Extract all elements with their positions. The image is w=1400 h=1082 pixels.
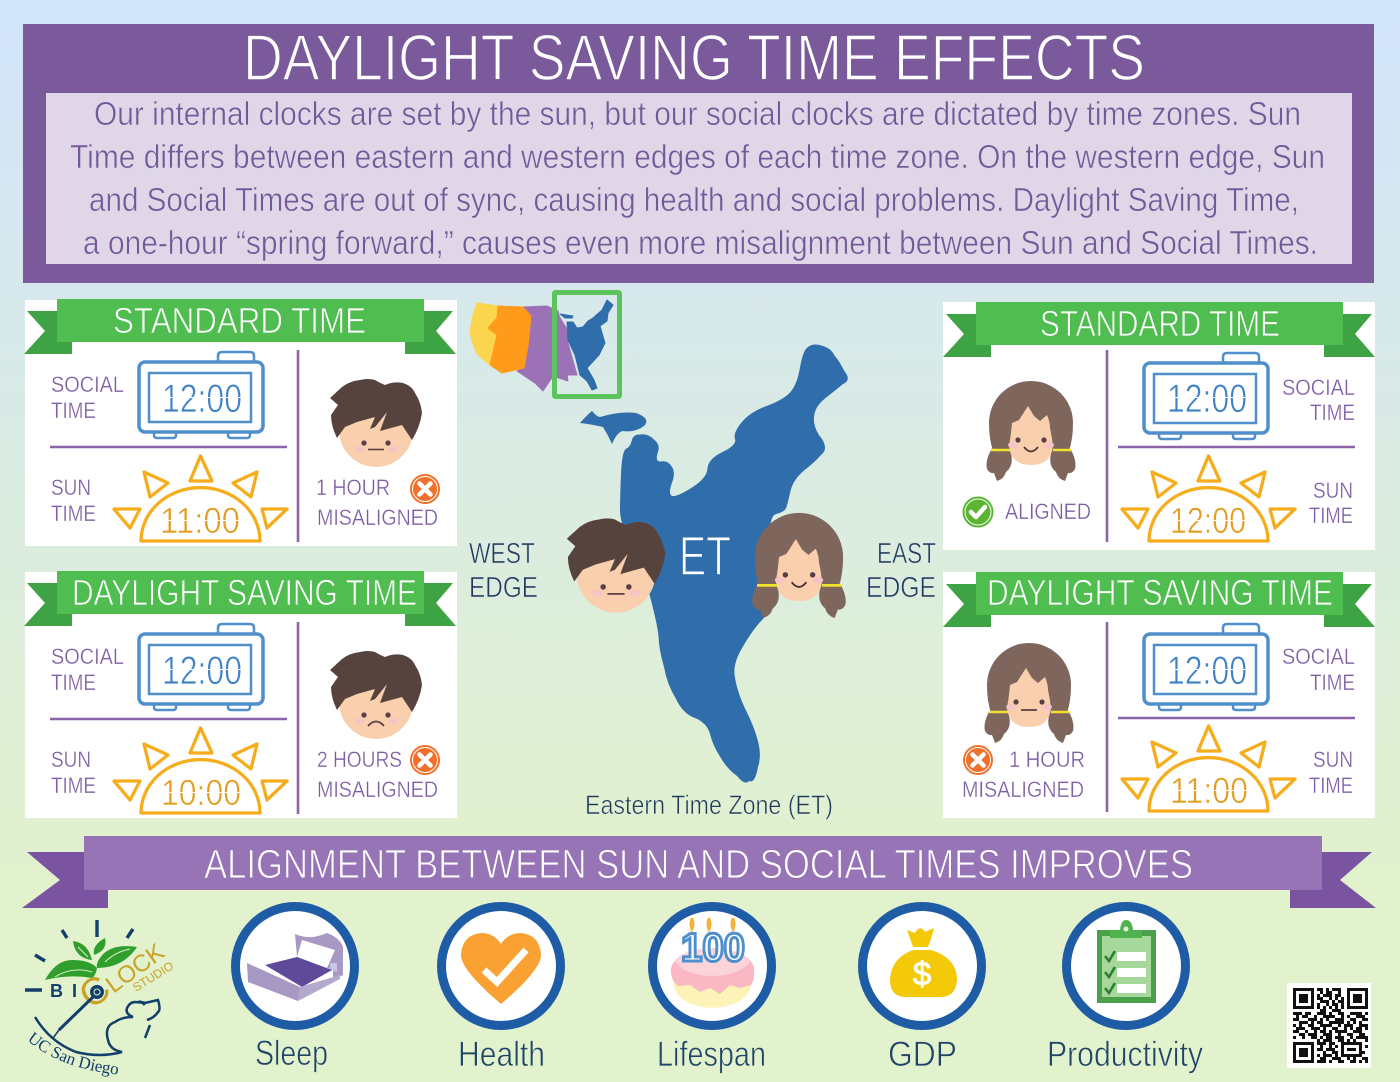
social time label: TIME <box>1310 670 1355 695</box>
icon: money bag <box>862 906 982 1026</box>
label: west edge <box>469 538 538 604</box>
icon: x mark <box>963 745 993 775</box>
label: lifespan: Lifespan <box>657 1035 766 1074</box>
misaligned label <box>962 747 1085 802</box>
intro text block: Our internal clocks are set by the sun, but our social clocks are dictated by time zones. Sun <box>94 95 1301 132</box>
icon: girl smiling <box>986 381 1076 481</box>
ribbon: standard time: STANDARD TIME <box>1040 303 1280 344</box>
header panel <box>23 21 1374 283</box>
icon: sun 11:00: 11:00 <box>1170 770 1248 811</box>
misaligned label <box>316 475 438 530</box>
icon: alarm clock 12:00 <box>1144 353 1268 439</box>
misaligned label: MISALIGNED <box>962 777 1084 802</box>
map: eastern time zone <box>580 345 848 783</box>
item: lifespan <box>652 906 772 1074</box>
icon: alarm clock 12:00: 12:00 <box>162 649 242 693</box>
ribbon: standard time <box>943 302 1375 357</box>
logo: biological clock studio: STUDIO <box>130 959 176 995</box>
label: sleep: Sleep <box>255 1034 328 1073</box>
label: west edge: WEST <box>469 538 535 570</box>
label: east edge <box>866 538 936 604</box>
misaligned label: 1 HOUR <box>316 475 390 500</box>
sun time label <box>1309 478 1353 528</box>
highlight frame <box>554 292 620 396</box>
icon: boy neutral <box>330 379 422 467</box>
item: productivity <box>1047 906 1203 1074</box>
social time label: SOCIAL <box>1282 644 1355 669</box>
sun time label: TIME <box>1309 503 1353 528</box>
ribbon: daylight saving time <box>24 571 456 626</box>
misaligned label: 2 HOURS <box>317 747 402 772</box>
panel: east edge daylight saving time <box>943 572 1375 818</box>
icon: alarm clock 12:00 <box>139 624 263 710</box>
icon: alarm clock 12:00 <box>1144 624 1268 710</box>
icon: sun 11:00 <box>1122 726 1295 811</box>
banner: alignment improves: ALIGNMENT BETWEEN SUN AND SOCIAL TIMES IMPROVES <box>204 841 1193 887</box>
map caption: Eastern Time Zone (ET) <box>585 790 833 820</box>
label: gdp: GDP <box>888 1035 957 1074</box>
label: east edge: EAST <box>877 538 936 570</box>
social time label: TIME <box>1310 400 1355 425</box>
logo: biological clock studio: CLOCK <box>72 929 171 1017</box>
sun time label: SUN <box>1313 478 1353 503</box>
social time label <box>1282 375 1355 425</box>
icon: sun 11:00 <box>114 456 287 541</box>
social time label: SOCIAL <box>1282 375 1355 400</box>
social time label: TIME <box>51 670 96 695</box>
icon: alarm clock 12:00: 12:00 <box>162 377 242 421</box>
logo: biological clock studio <box>25 920 176 1077</box>
item: gdp <box>862 906 982 1074</box>
social time label <box>1282 644 1355 695</box>
icon: check mark <box>962 496 994 528</box>
social time label <box>51 372 124 423</box>
misaligned label <box>317 747 438 802</box>
sun time label: TIME <box>51 501 96 526</box>
misaligned label: MISALIGNED <box>317 777 438 802</box>
ribbon: daylight saving time <box>943 572 1375 627</box>
sun time label: TIME <box>51 773 96 798</box>
label: east edge: EDGE <box>866 572 936 604</box>
sun time label: TIME <box>1309 773 1353 798</box>
title: DAYLIGHT SAVING TIME EFFECTS <box>243 21 1145 94</box>
icon: x mark <box>410 474 440 504</box>
panel: west edge standard time <box>24 299 457 546</box>
ribbon: daylight saving time: DAYLIGHT SAVING TIME <box>72 572 417 613</box>
social time label: SOCIAL <box>51 644 124 669</box>
icon: birthday cake: 100 <box>681 926 745 970</box>
social time label: TIME <box>51 398 96 423</box>
sun time label <box>51 475 96 526</box>
icon: x mark <box>410 745 440 775</box>
icon: large girl <box>752 513 846 618</box>
misaligned label: MISALIGNED <box>317 505 438 530</box>
label: productivity: Productivity <box>1047 1035 1203 1074</box>
icon: sun 10:00: 10:00 <box>161 772 241 813</box>
banner: alignment improves <box>22 836 1376 908</box>
icon: alarm clock 12:00: 12:00 <box>1167 649 1247 693</box>
label: west edge: EDGE <box>469 572 538 604</box>
aligned label: ALIGNED <box>1005 499 1091 524</box>
icon: girl neutral <box>984 643 1074 743</box>
item: sleep <box>236 906 354 1073</box>
social time label <box>51 644 124 695</box>
icon: alarm clock 12:00: 12:00 <box>1167 377 1247 421</box>
sun time label <box>1309 747 1353 798</box>
icon: birthday cake <box>652 906 772 1026</box>
social time label: SOCIAL <box>51 372 124 397</box>
icon: sun 12:00 <box>1122 456 1295 541</box>
intro text block: and Social Times are out of sync, causing health and social problems. Daylight Saving Time, <box>89 181 1299 218</box>
panel: west edge daylight saving time <box>24 571 457 818</box>
icon: alarm clock 12:00 <box>139 352 263 438</box>
misaligned label: 1 HOUR <box>1009 747 1085 772</box>
panel: east edge standard time <box>943 302 1375 550</box>
qr code <box>1287 983 1371 1068</box>
sun time label: SUN <box>51 747 91 772</box>
icon: clipboard <box>1066 906 1186 1026</box>
map label: ET: ET <box>679 524 731 587</box>
logo: biological clock studio: UC San Diego <box>30 1032 118 1077</box>
icon: bed <box>236 906 354 1026</box>
logo: biological clock studio: BI <box>50 981 86 1001</box>
item: health <box>442 906 560 1074</box>
icon: money bag: $ <box>913 955 931 992</box>
intro text block <box>46 93 1352 264</box>
icon: sun 11:00: 11:00 <box>160 500 240 541</box>
sun time label: SUN <box>1313 747 1353 772</box>
inset map: US time zones <box>470 292 620 396</box>
icon: heart <box>442 906 560 1026</box>
icon: sun 10:00 <box>114 728 287 813</box>
icon: large boy <box>567 518 665 613</box>
sun time label: SUN <box>51 475 91 500</box>
icon: boy sad <box>330 651 422 739</box>
ribbon: daylight saving time: DAYLIGHT SAVING TIME <box>987 572 1333 613</box>
icon: sun 12:00: 12:00 <box>1170 500 1246 541</box>
ribbon: standard time <box>24 299 456 354</box>
ribbon: standard time: STANDARD TIME <box>113 300 366 341</box>
label: health: Health <box>458 1035 545 1074</box>
sun time label <box>51 747 96 798</box>
